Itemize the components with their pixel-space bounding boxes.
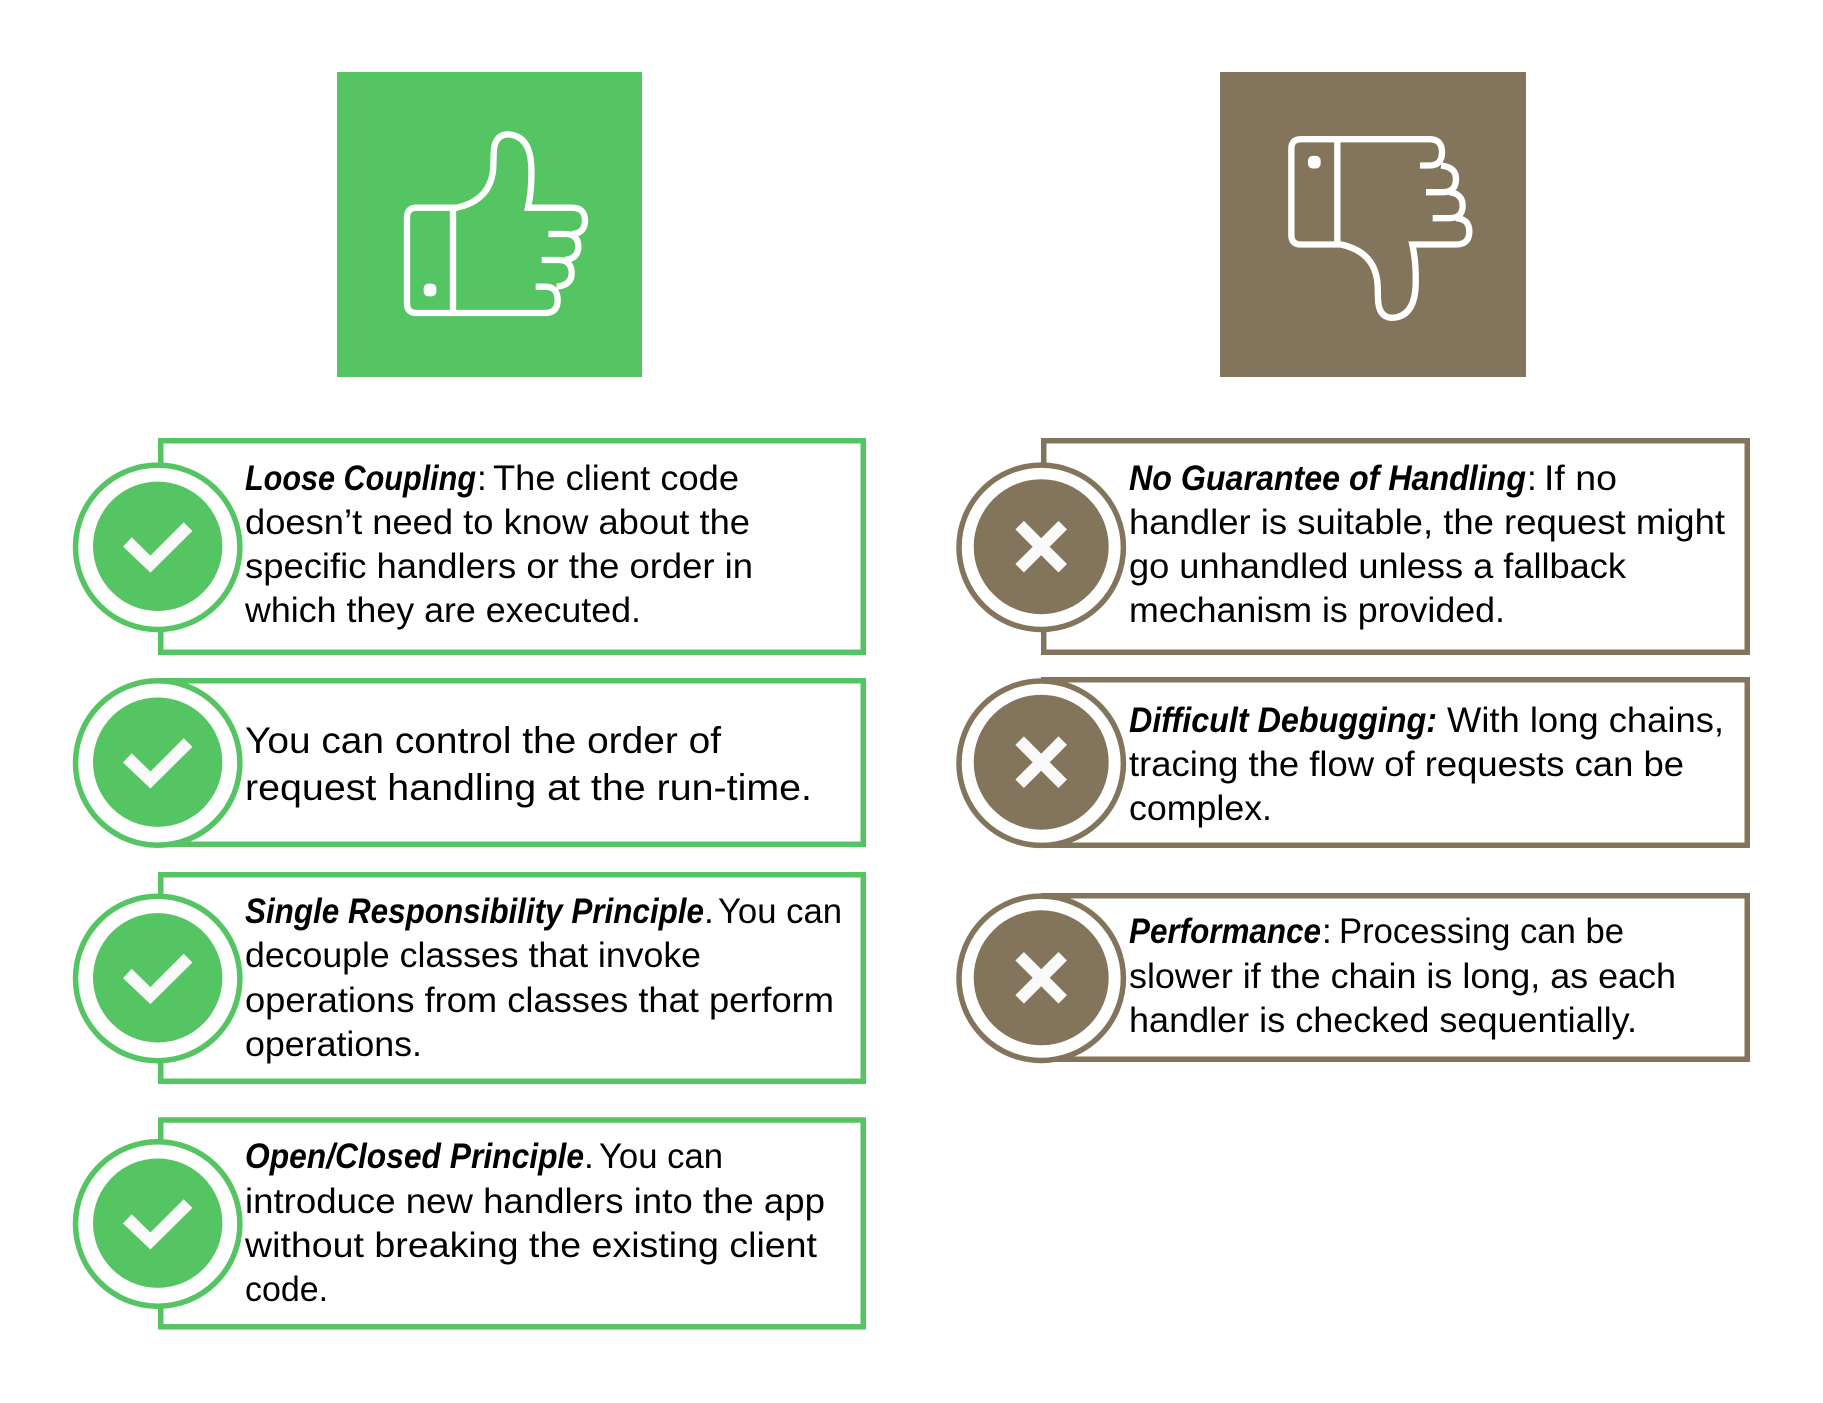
text: open closed: without breaking the existing client [244, 1226, 817, 1265]
thumbs-up tile [337, 72, 642, 377]
text: performance: : [1322, 912, 1332, 951]
text: open closed [244, 1137, 825, 1309]
text: no guarantee: : [1527, 459, 1537, 498]
text: difficult debugging: tracing the flow of requests can be [1129, 745, 1684, 784]
text: performance: slower if the chain is long, as each [1129, 957, 1676, 996]
text: difficult debugging: Difficult Debugging: [1129, 701, 1437, 740]
text: loose coupling: The client code [493, 459, 739, 498]
text: loose coupling: : [477, 459, 487, 498]
pro card: run-time order [76, 681, 863, 845]
text: performance: Processing can be [1339, 912, 1624, 951]
text: no guarantee: If no [1544, 459, 1617, 498]
icon: thumbs up [407, 134, 585, 313]
icon: thumbs down [1291, 139, 1469, 318]
icon: cross badge [959, 465, 1123, 630]
text: no guarantee: handler is suitable, the request might [1129, 503, 1725, 542]
text: performance: handler is checked sequentially. [1129, 1001, 1637, 1040]
text: difficult debugging: With long chains, [1447, 701, 1724, 740]
text: open closed: code. [245, 1270, 328, 1309]
panel: cons column [959, 72, 1747, 1060]
text: difficult debugging [1129, 701, 1724, 828]
text: run-time order [245, 719, 812, 808]
text: open closed: You can [599, 1137, 723, 1176]
con card: difficult debugging [959, 680, 1747, 845]
thumbs-down tile [1220, 72, 1526, 377]
text: single responsibility: Single Responsibility Principle [245, 892, 704, 931]
panel: pros column [76, 72, 863, 1327]
pro card: single responsibility [76, 875, 863, 1081]
text: no guarantee [1129, 459, 1725, 630]
pro card: open closed [76, 1120, 863, 1327]
text: run-time order: You can control the order of [245, 719, 722, 761]
con card: no guarantee [959, 441, 1747, 652]
text: difficult debugging: complex. [1129, 789, 1272, 828]
icon: cross badge [959, 681, 1123, 845]
text: open closed: Open/Closed Principle [245, 1137, 584, 1176]
text: performance [1129, 912, 1676, 1040]
text: loose coupling: doesn’t need to know about the [245, 503, 750, 542]
icon: check badge [76, 465, 240, 630]
icon: check badge [76, 681, 240, 845]
text: loose coupling: which they are executed. [244, 591, 641, 630]
text: single responsibility: decouple classes that invoke [245, 936, 701, 975]
icon: cross badge [959, 896, 1123, 1060]
icon: check badge [76, 896, 240, 1061]
text: open closed: introduce new handlers into the app [245, 1182, 825, 1221]
text: performance: Performance [1129, 912, 1321, 951]
text: single responsibility: You can [718, 892, 842, 931]
text: no guarantee: mechanism is provided. [1129, 591, 1505, 630]
text: single responsibility: . [704, 892, 714, 931]
text: no guarantee: go unhandled unless a fallback [1129, 547, 1627, 586]
con card: performance [959, 896, 1747, 1060]
text: single responsibility [245, 892, 842, 1064]
text: single responsibility: operations. [245, 1025, 422, 1064]
text: run-time order: request handling at the run-time. [245, 766, 812, 808]
text: loose coupling [244, 459, 753, 630]
pro card: loose coupling [76, 441, 863, 652]
text: single responsibility: operations from classes that perform [245, 981, 834, 1020]
text: open closed: . [584, 1137, 594, 1176]
text: no guarantee: No Guarantee of Handling [1129, 459, 1526, 498]
icon: check badge [76, 1142, 240, 1306]
text: loose coupling: specific handlers or the order in [245, 547, 753, 586]
text: loose coupling: Loose Coupling [245, 459, 476, 498]
